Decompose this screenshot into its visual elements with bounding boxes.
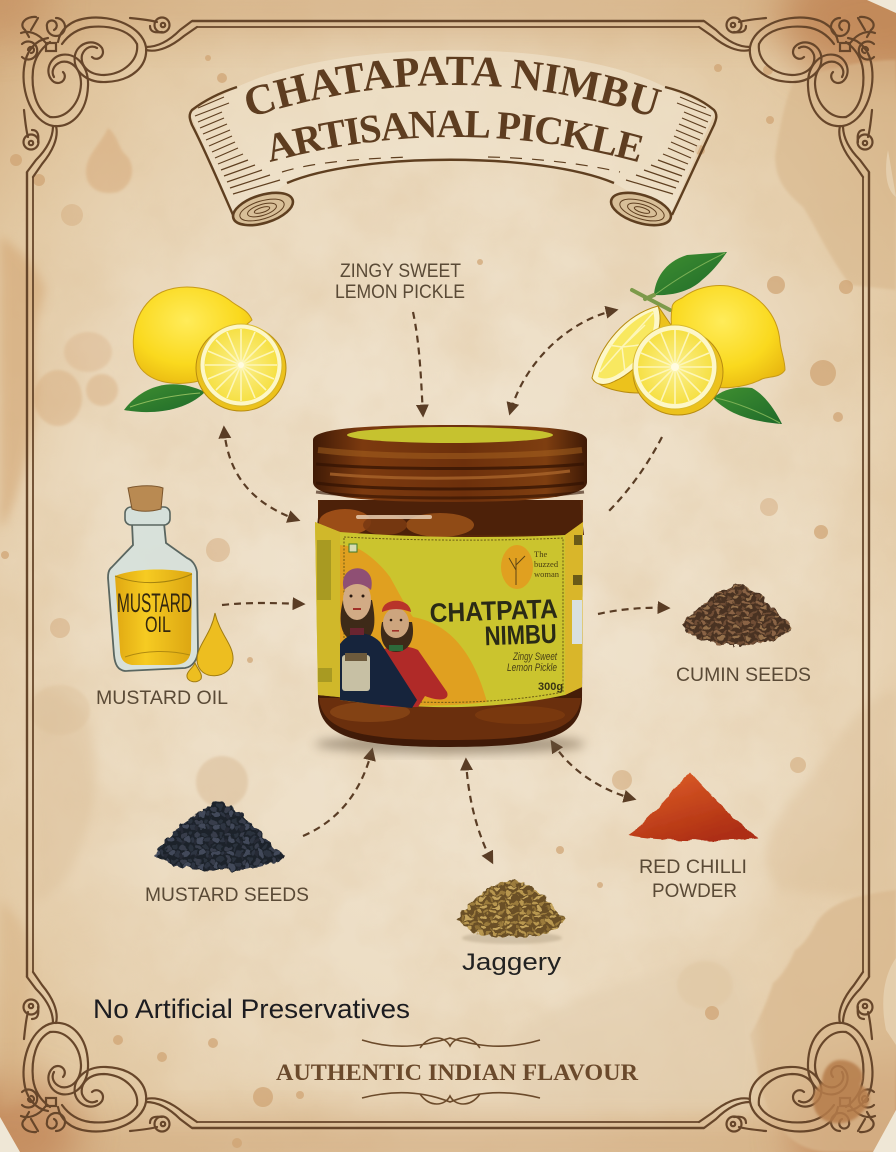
icon: black mustard seeds pile — [155, 802, 283, 870]
icon: mustard oil bottle: OIL — [145, 612, 171, 637]
ornament below footer — [362, 1093, 540, 1104]
label: mustard seeds: MUSTARD SEEDS — [145, 884, 309, 906]
jar lid — [313, 425, 587, 502]
label: red chilli powder — [639, 856, 747, 902]
icon: cumin seeds pile — [682, 584, 792, 645]
icon: mustard oil bottle: MUSTARD — [117, 588, 192, 618]
tagline: Zingy Sweet — [512, 651, 558, 663]
banner roll: right — [607, 187, 675, 231]
icon: red chilli powder pile — [627, 772, 759, 841]
label: mustard oil: MUSTARD OIL — [96, 687, 228, 709]
title line 2: ARTISANAL PICKLE — [270, 110, 642, 162]
label: zingy sweet lemon pickle: LEMON PICKLE — [335, 281, 465, 303]
right panel text — [573, 535, 582, 585]
stain over bottom-right corner — [813, 1060, 869, 1123]
jar label: buzzed — [534, 559, 559, 569]
product name: NIMBU — [484, 619, 557, 651]
product name — [429, 594, 558, 651]
product name: CHATPATA — [429, 594, 558, 628]
label: jaggery: Jaggery — [462, 949, 561, 976]
left panel text — [317, 540, 332, 682]
icon: lemon left — [124, 287, 286, 412]
title line 1: CHATAPATA NIMBU — [246, 56, 662, 114]
jar label — [315, 522, 583, 708]
icon: jaggery seeds pile — [458, 880, 564, 944]
banner roll: left — [229, 187, 297, 231]
jar label: The — [534, 549, 547, 559]
net weight: 300g — [538, 681, 563, 693]
jar label: woman — [534, 569, 560, 579]
pickle jar — [313, 425, 587, 754]
illustration: two women — [340, 568, 448, 708]
label: red chilli powder: RED CHILLI — [639, 856, 747, 878]
tagline — [507, 651, 558, 674]
label: zingy sweet lemon pickle — [335, 260, 465, 303]
note: no artificial preservatives: No Artificial Preservatives — [93, 994, 410, 1024]
label: cumin seeds: CUMIN SEEDS — [676, 664, 811, 686]
jar body — [318, 500, 583, 747]
label: zingy sweet lemon pickle: ZINGY SWEET — [340, 260, 461, 282]
icon: mustard oil bottle — [108, 486, 233, 682]
tagline: Lemon Pickle — [507, 662, 557, 674]
icon: lemons right — [592, 252, 785, 424]
logo circle — [501, 545, 533, 589]
footer text: AUTHENTIC INDIAN FLAVOUR — [276, 1060, 638, 1085]
arrows — [222, 310, 668, 862]
label: red chilli powder: POWDER — [652, 880, 737, 902]
icon: oil drop — [197, 613, 233, 676]
title banner scroll — [188, 50, 718, 226]
ornament above footer — [362, 1038, 540, 1048]
